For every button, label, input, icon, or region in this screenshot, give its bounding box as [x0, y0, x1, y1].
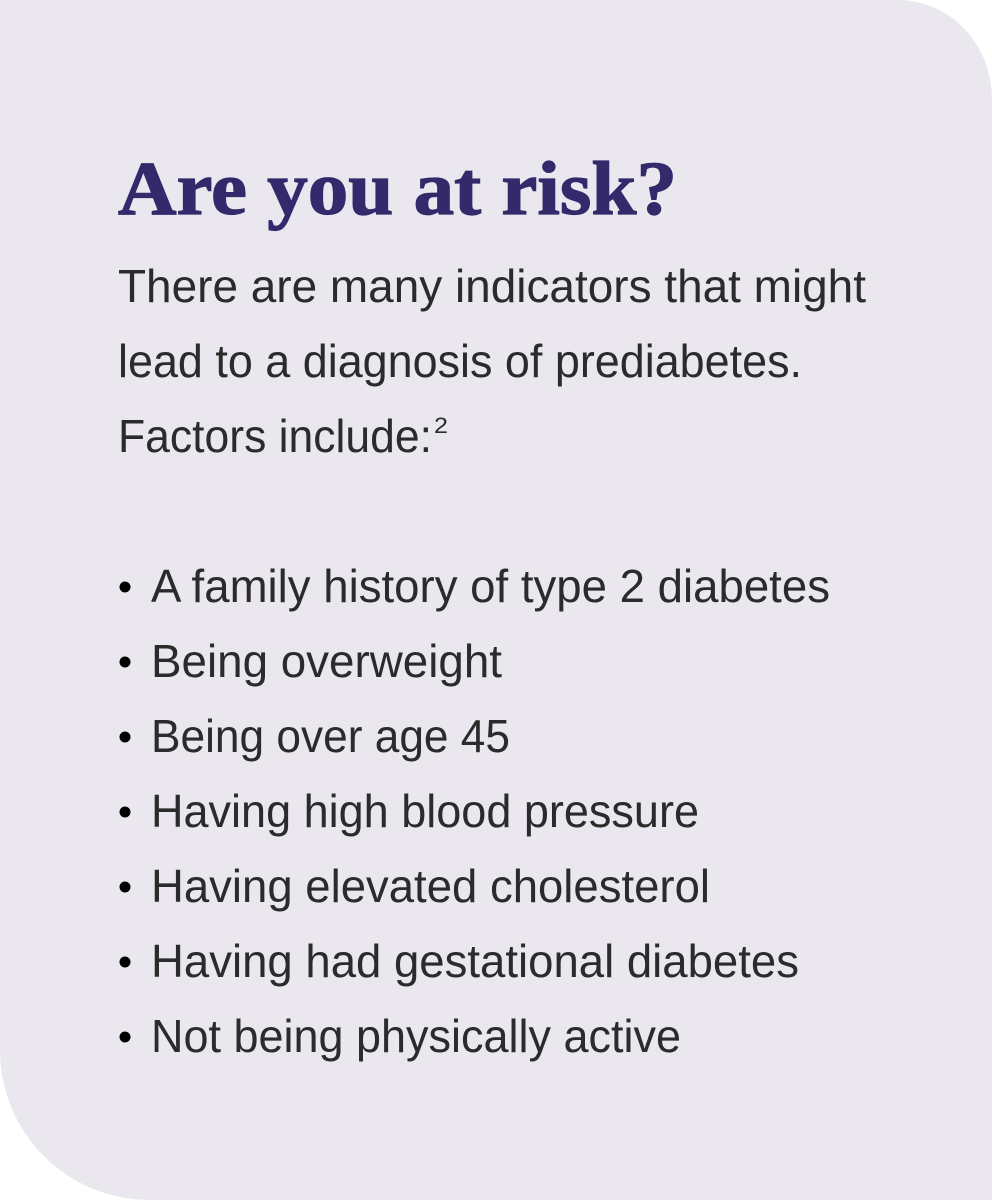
bullet: elevated cholesterol: Having elevated cholesterol	[151, 860, 710, 912]
intro text block: lead to a diagnosis of prediabetes.	[118, 335, 802, 387]
bullet: overweight: Being overweight	[151, 635, 502, 687]
intro text block	[118, 260, 866, 462]
bullet: high blood pressure: Having high blood pressure	[151, 785, 699, 837]
bullet: gestational diabetes: Having had gestational diabetes	[151, 935, 799, 987]
bullet: family history: A family history of type 2 diabetes	[151, 560, 830, 612]
intro text block: There are many indicators that might	[118, 260, 866, 312]
intro text block: 2	[434, 413, 448, 438]
bullet list of risk factors	[120, 560, 830, 1062]
bullet: not physically active: Not being physically active	[151, 1010, 681, 1062]
intro text block: Factors include:	[118, 410, 432, 462]
bullet: over age 45: Being over age 45	[151, 710, 510, 762]
heading: Are you at risk?	[118, 147, 677, 231]
